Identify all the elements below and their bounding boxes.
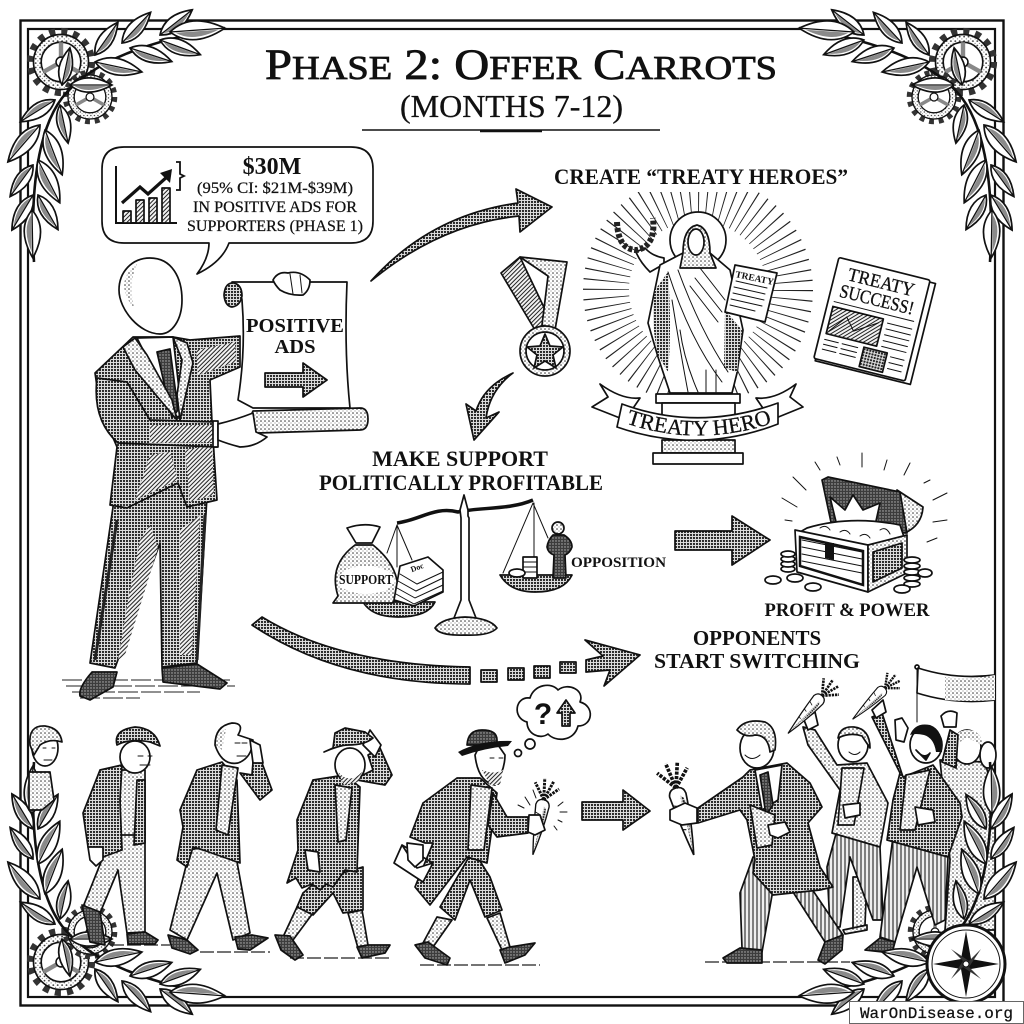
laurel: bottom right	[798, 762, 1022, 1020]
documents stack	[394, 557, 443, 606]
watermark: WarOnDisease.org	[860, 1005, 1013, 1023]
figure: faceless man in suit	[62, 258, 240, 700]
supporter 2: light suit with carrot	[780, 674, 888, 927]
callout: $30M positive ads: $30M	[243, 154, 301, 180]
opponent 1: partial figure	[29, 726, 62, 810]
heading: make support politically profitable: POLITICALLY PROFITABLE	[319, 470, 603, 495]
icon: rising bar chart	[116, 162, 184, 223]
supporter 3: dark suit with carrot	[846, 670, 962, 953]
heading: make support politically profitable: MAKE SUPPORT	[372, 446, 548, 471]
shirt	[137, 337, 182, 417]
statue: treaty hero	[583, 192, 813, 465]
carrot in hand	[520, 776, 561, 857]
icon: treasure chest with crown	[765, 453, 947, 593]
coin pile	[800, 521, 905, 548]
hood and head	[680, 225, 716, 268]
laurel wreath	[617, 218, 653, 250]
opponent 4: tattered man	[275, 728, 392, 960]
opponent 5: man considering carrot	[394, 730, 567, 965]
jacket	[95, 336, 240, 508]
callout: $30M positive ads: IN POSITIVE ADS FOR	[193, 199, 357, 216]
laurel: top left	[2, 4, 226, 262]
envelope	[394, 845, 433, 882]
chest side	[868, 535, 907, 592]
pedestal	[656, 394, 740, 403]
arrow: medal down to make support	[466, 373, 513, 440]
title divider	[362, 130, 660, 132]
newspaper: treaty success: TREATY	[846, 264, 917, 301]
tie	[157, 349, 178, 418]
lapels	[123, 337, 193, 420]
heading: opponents start switching	[654, 626, 860, 673]
heading: opponents start switching: OPPONENTS	[693, 626, 821, 650]
newspaper: treaty success	[813, 257, 936, 384]
coins on right pan	[509, 557, 537, 578]
gears: top left corner	[30, 31, 115, 122]
icon: star medal	[501, 257, 570, 376]
chest front	[795, 530, 868, 592]
shoes	[80, 672, 117, 700]
scroll: positive ads: POSITIVE	[246, 315, 344, 337]
head	[119, 258, 182, 334]
callout: $30M positive ads: SUPPORTERS (PHASE 1)	[187, 218, 363, 235]
newspaper: treaty success: SUCCESS!	[837, 281, 916, 320]
arrow: toward new supporter	[582, 790, 650, 830]
banner	[592, 384, 640, 420]
robe	[648, 253, 743, 393]
chest lid	[897, 490, 923, 533]
laurel: bottom left	[2, 762, 226, 1020]
title: PHASE 2: O FFER CARROTS	[265, 42, 777, 89]
crown	[830, 495, 880, 530]
scroll: positive ads	[218, 272, 368, 447]
raised arm	[636, 248, 664, 272]
thought bubble	[514, 685, 590, 756]
opposition person	[547, 522, 572, 578]
arrow: curved to treaty heroes	[371, 189, 552, 281]
gears: bottom left corner	[30, 907, 115, 993]
rolled scroll bottom	[251, 408, 368, 433]
money bag: support: SUPPORT	[339, 572, 393, 587]
callout: $30M positive ads: (95% CI: $21M-$39M)	[197, 180, 353, 197]
crowd and flag	[843, 665, 996, 934]
scroll held by statue: TREATY	[734, 270, 775, 288]
heading: opponents start switching: START SWITCHING	[654, 649, 860, 673]
supporter 1: man offering carrot	[655, 721, 843, 964]
ground lines under walkers	[110, 945, 850, 965]
statue halo rays	[606, 198, 790, 382]
heading: create treaty heroes: CREATE “TREATY HEROES”	[554, 164, 848, 189]
opponent 2: man with cap	[82, 727, 160, 945]
hand at bottom of scroll	[218, 413, 267, 447]
arrow: scale to treasure	[675, 516, 770, 565]
opponent 3: bald man	[168, 723, 272, 954]
money bag: support	[333, 525, 398, 603]
statue: treaty hero: TREATY HERO	[628, 410, 770, 436]
trousers	[90, 480, 208, 668]
hand at top of scroll	[273, 272, 310, 295]
arrow: dashed switching arrow	[252, 617, 640, 686]
icon: compass	[927, 925, 1005, 1003]
thought bubble: ?	[534, 698, 552, 731]
documents stack: Doc	[409, 561, 425, 574]
callout: $30M positive ads	[102, 147, 373, 274]
scroll held by statue	[725, 265, 777, 322]
subtitle: (MONTHS 7-12)	[400, 88, 623, 124]
gears: top right corner	[909, 31, 994, 122]
arrow on scroll	[265, 363, 327, 397]
balance scale: OPPOSITION	[571, 555, 666, 571]
label: profit and power: PROFIT & POWER	[764, 600, 930, 621]
gear: bottom right corner	[910, 907, 960, 957]
heading: make support politically profitable	[319, 446, 603, 495]
loose coins	[765, 551, 932, 593]
scroll: positive ads: ADS	[274, 336, 316, 358]
laurel: top right	[798, 4, 1022, 262]
balance scale	[333, 495, 666, 635]
sleeve	[96, 378, 217, 447]
